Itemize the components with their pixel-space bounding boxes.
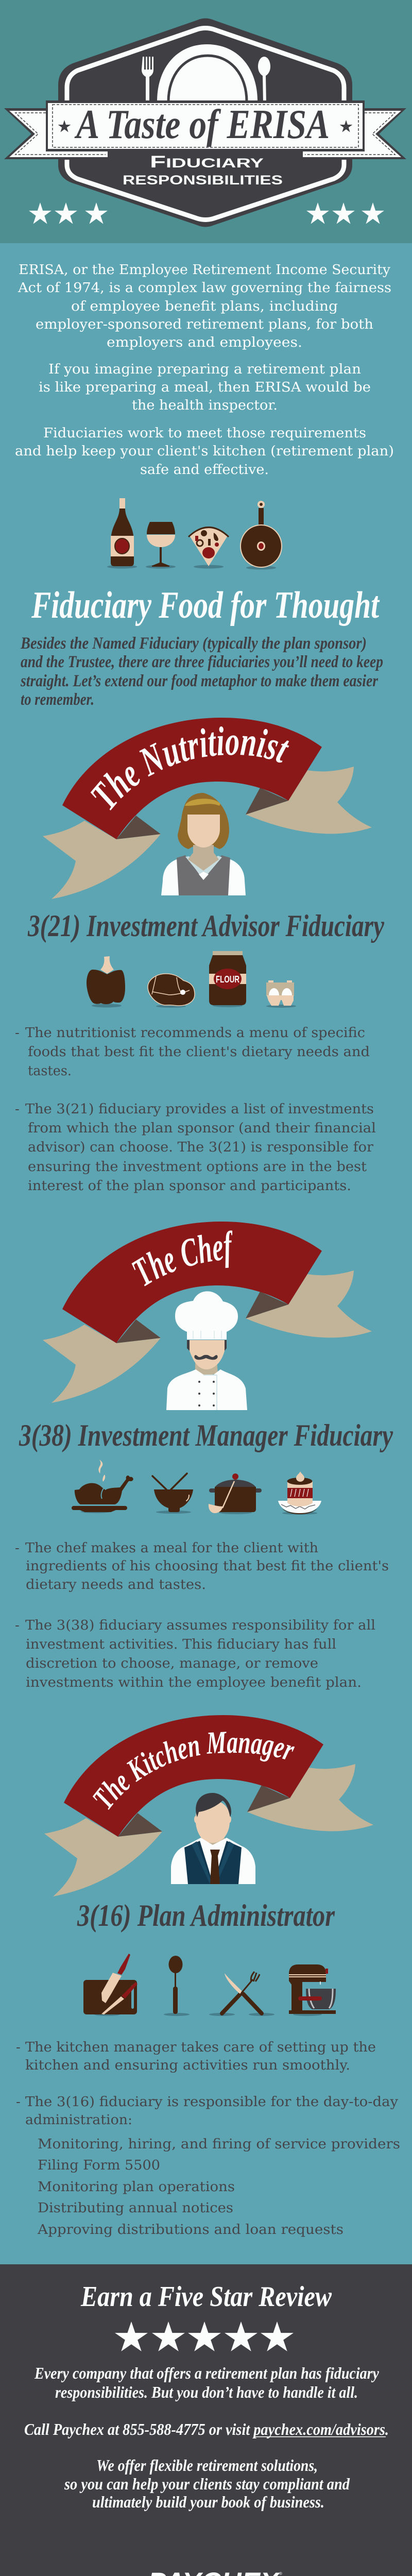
intro text: ERISA, or the Employee Retirement Income Security (19, 262, 390, 278)
text: chef description: The chef makes a meal for the client with (25, 1540, 318, 1556)
text: nutritionist description: - (15, 1025, 20, 1041)
icon: star right of title (340, 120, 352, 132)
icon: flour bag (209, 951, 246, 1007)
text: kitchen manager description (16, 2040, 400, 2238)
stars right (306, 202, 384, 224)
ribbon main (46, 100, 365, 151)
icons: ingredients row (87, 951, 296, 1008)
text: nutritionist description: from which the plan sponsor (and their financial (28, 1121, 376, 1136)
icon: frying pan (241, 501, 282, 570)
text: kitchen manager description: - (16, 2094, 21, 2110)
text: nutritionist description: interest of the plan sponsor and participants. (28, 1178, 351, 1194)
header band (0, 0, 412, 243)
footer panel (0, 2264, 412, 2576)
text: kitchen manager description: Monitoring plan operations (38, 2179, 235, 2195)
intro text: Fiduciaries work to meet those requirements (43, 426, 366, 441)
ribbon tail left (4, 108, 108, 159)
intro text: If you imagine preparing a retirement plan (48, 362, 361, 377)
icon: wine bottle (107, 498, 137, 569)
ribbon: the chef: The Chef (132, 1230, 233, 1286)
ribbon tail right (303, 108, 406, 159)
stars left (29, 202, 108, 224)
intro text: the health inspector. (132, 398, 278, 413)
icon: roast turkey (72, 1460, 133, 1513)
text: chef description: ingredients of his choosing that best fit the client's (26, 1558, 389, 1574)
footer text: so you can help your clients stay compliant and (64, 2475, 350, 2493)
text: nutritionist description: foods that best fit the client's dietary needs and (28, 1044, 370, 1060)
ribbon: the nutritionist (43, 718, 372, 899)
intro text: safe and effective. (140, 462, 269, 478)
intro text: employers and employees. (107, 335, 302, 350)
text: chef description: dietary needs and tastes. (26, 1577, 206, 1592)
figure: chef (166, 1291, 247, 1410)
text: chef description: discretion to choose, manage, or remove (26, 1656, 318, 1671)
text: chef description (15, 1540, 389, 1690)
icon: stand mixer (289, 1964, 336, 2016)
intro text: Act of 1974, is a complex law governing the fairness (18, 280, 391, 296)
text: kitchen manager description: The 3(16) fiduciary is responsible for the day-to-day (25, 2094, 398, 2110)
intro text: and help keep your client's kitchen (retirement plan) (15, 444, 394, 459)
text: chef description: - (15, 1618, 20, 1633)
intro script text: to remember. (21, 690, 94, 709)
icon: steak (148, 974, 195, 1008)
five stars (115, 2321, 294, 2351)
subtitle: fiduciary: F IDUCIARY (150, 152, 264, 171)
badge: hexagon (58, 19, 352, 227)
intro script text: Besides the Named Fiduciary (typically the plan sponsor) (20, 634, 367, 653)
icon: bell pepper (87, 956, 125, 1008)
subtitle: responsibilities: RESPONSIBILITIES (123, 173, 283, 188)
footer text: ultimately build your book of business. (92, 2493, 324, 2511)
text: kitchen manager description: administration: (25, 2112, 132, 2128)
icon: wooden spoon (164, 1956, 190, 2016)
icon: pot and ladle (209, 1473, 262, 1514)
ribbon: the nutritionist: The Nutritionist (91, 726, 289, 811)
intro script text (20, 634, 383, 709)
text: nutritionist description (15, 1025, 376, 1194)
text: kitchen manager description: kitchen and ensuring activities run smoothly. (25, 2058, 350, 2073)
text: kitchen manager description: Monitoring, hiring, and firing of service providers (38, 2137, 400, 2152)
text: nutritionist description: tastes. (28, 1063, 72, 1079)
icon: pizza slice (188, 527, 229, 569)
text: nutritionist description: - (15, 1101, 20, 1117)
text: nutritionist description: ensuring the investment options are in the best (28, 1159, 367, 1175)
icon: star left of title (58, 120, 71, 132)
figure: nutritionist (161, 793, 246, 895)
icon: cutting board and knives (83, 1954, 138, 2016)
intro text: is like preparing a meal, then ERISA would be (39, 380, 371, 395)
icons: meals row (72, 1460, 321, 1515)
heading: 3(16): 3(16) Plan Administrator (77, 1899, 335, 1933)
logo: paychex: ® (279, 2571, 282, 2576)
text: chef description: investment activities. This fiduciary has full (26, 1637, 336, 1652)
ribbon: the chef (43, 1222, 372, 1403)
title: A Taste of ERISA (74, 102, 330, 147)
intro text: employer-sponsored retirement plans, for both (36, 317, 373, 332)
text: kitchen manager description: - (16, 2040, 21, 2055)
icon: crossed fork and knife (209, 1972, 274, 2016)
text: kitchen manager description: The kitchen manager takes care of setting up the (25, 2040, 376, 2055)
ribbon: the kitchen manager: The Kitchen Manager (93, 1732, 295, 1810)
icon: bowl and chopsticks (152, 1473, 193, 1514)
icon: fork (142, 57, 153, 103)
intro text (15, 262, 394, 478)
text: nutritionist description: The nutritionist recommends a menu of specific (25, 1025, 365, 1041)
text: kitchen manager description: Distributing annual notices (38, 2200, 233, 2216)
text: nutritionist description: advisor) can choose. The 3(21) is responsible for (28, 1140, 374, 1155)
intro text: of employee benefit plans, including (71, 299, 338, 314)
icon: wine glass (146, 522, 176, 569)
footer text: responsibilities. But you don’t have to handle it all. (55, 2383, 358, 2401)
ribbon: the kitchen manager (44, 1715, 373, 1896)
text: kitchen manager description: Filing Form 5500 (38, 2158, 160, 2173)
text: chef description: - (15, 1540, 20, 1556)
text: kitchen manager description: Approving distributions and loan requests (37, 2222, 344, 2238)
footer text (24, 2364, 389, 2511)
icon: plate (157, 44, 258, 101)
icon: flour bag: FLOUR (216, 974, 239, 985)
figure: kitchen manager (171, 1793, 255, 1884)
text: chef description: investments within the employee benefit plan. (26, 1675, 362, 1690)
icon: egg carton (266, 980, 296, 1008)
text: nutritionist description: The 3(21) fiduciary provides a list of investments (25, 1101, 374, 1117)
icon: spoon (258, 57, 270, 103)
text: chef description: The 3(38) fiduciary assumes responsibility for all (25, 1618, 375, 1633)
icon: layer cake (278, 1471, 321, 1515)
footer heading: Earn a Five Star Review (80, 2281, 332, 2313)
icons: kitchen tools row (83, 1954, 336, 2016)
footer text: We offer flexible retirement solutions, (96, 2456, 318, 2475)
icons: food row one (107, 498, 282, 570)
